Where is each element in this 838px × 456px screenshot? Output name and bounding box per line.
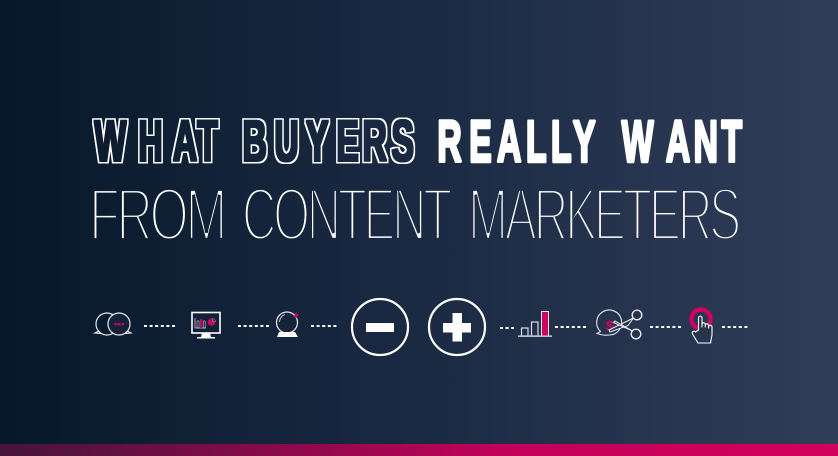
title: solid words: REALLY WANT — [437, 110, 742, 175]
title: outlined words: WHAT BUYERS — [95, 110, 414, 174]
dotted connector 3 — [311, 325, 337, 327]
title line 1 — [95, 110, 742, 175]
title line 2: CONTENT — [242, 173, 451, 256]
dotted connector 7 — [722, 326, 749, 328]
icon: pointer hand on pink ring — [692, 310, 712, 343]
bottom accent bar — [0, 444, 838, 456]
title line 2: FROM — [89, 173, 224, 256]
dotted connector 6 — [650, 326, 682, 328]
icon: speech bubbles — [95, 313, 131, 335]
icon: dollar bubble and scissors — [597, 310, 642, 339]
icon: minus button — [352, 299, 408, 355]
dotted connector 1 — [144, 325, 176, 327]
dotted connector 2 — [238, 325, 270, 327]
icon: plus button — [429, 299, 485, 355]
dotted connector 5 — [555, 326, 588, 328]
title line 2 — [89, 173, 739, 256]
icon: monitor with charts — [192, 312, 220, 338]
dotted connector 4 — [500, 327, 514, 329]
icon: rising bar chart — [518, 312, 552, 337]
icon: crystal ball — [276, 312, 299, 337]
icon: dollar bubble and scissors: $ — [606, 318, 615, 335]
